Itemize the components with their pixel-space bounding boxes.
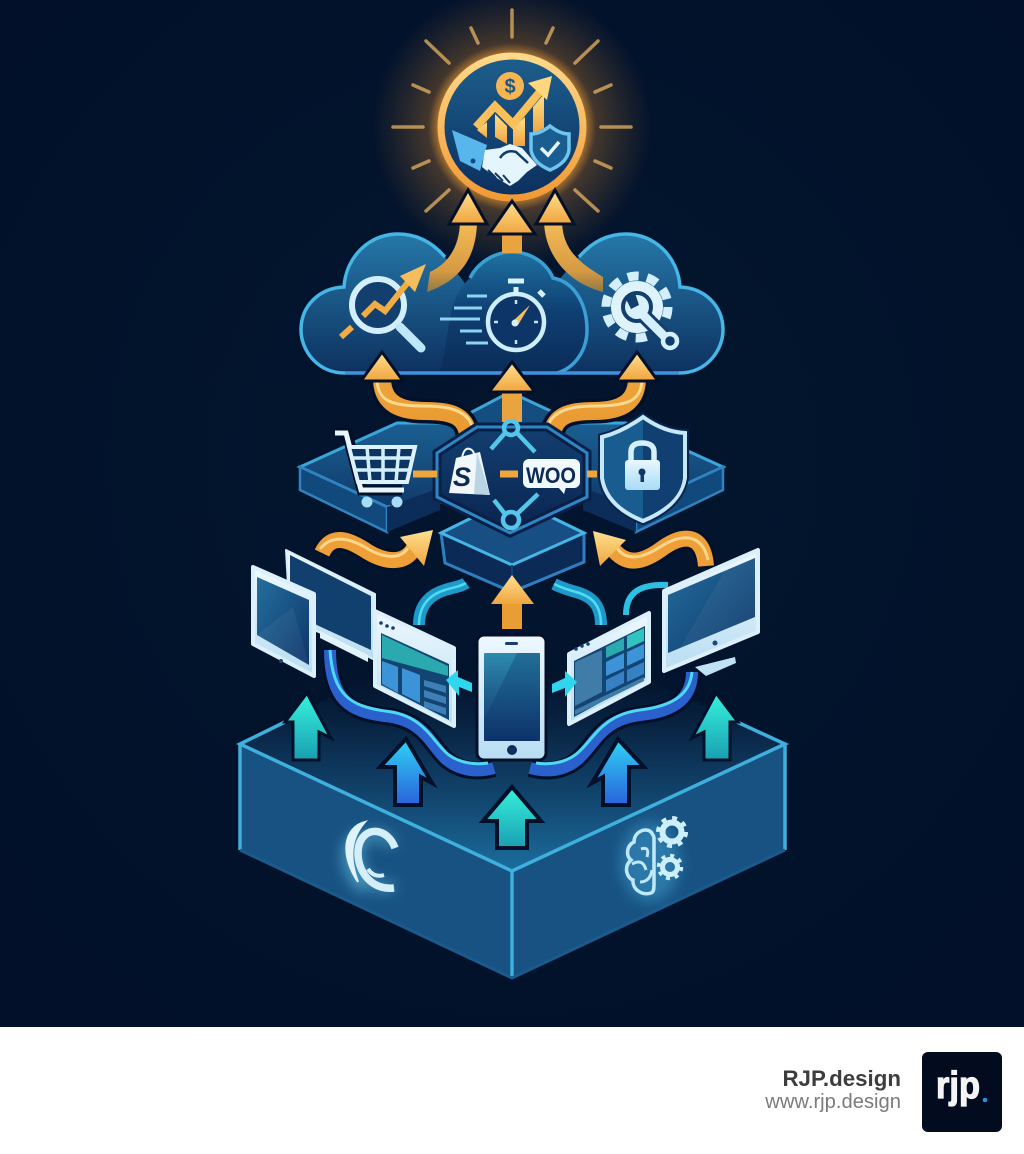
arrow: centre to sun: [489, 201, 535, 253]
lower cube: [441, 498, 584, 592]
right cloud: [520, 234, 723, 373]
small arrow: phone to left window: [446, 670, 472, 696]
monitor: [664, 550, 758, 676]
cloud base line: [345, 371, 679, 375]
brand logo: [922, 1052, 1002, 1132]
arrow: right blue: [592, 739, 644, 805]
icon: shopping cart: [335, 433, 415, 508]
small arrow: phone to right window: [552, 671, 577, 697]
arrow: centre into clouds: [489, 362, 535, 422]
brand name: RJP.design: [782, 1066, 901, 1091]
arrow: left blue: [380, 739, 432, 805]
left cloud: [301, 234, 500, 373]
growth bars: [477, 94, 544, 146]
up arrows from foundation: [285, 693, 738, 848]
icon: padlock shield: [602, 417, 685, 521]
icon: gear and wrench: [606, 276, 677, 348]
hexagon outline: [437, 427, 587, 533]
cloud layer: [301, 190, 723, 373]
shield check icon: [531, 126, 569, 170]
connector bars: [413, 470, 597, 478]
platform layer: e-commerce hub: [300, 352, 723, 592]
brand logo: rjp: [936, 1065, 980, 1107]
blue data flow lines: [330, 650, 692, 770]
laptop: [286, 550, 375, 662]
curve: left: [419, 583, 466, 625]
arrow: phone to hub: [491, 575, 534, 629]
icon: Shopify bag: S: [453, 462, 471, 492]
icon: WooCommerce bubble: [523, 459, 580, 494]
browser window left: [375, 611, 454, 726]
smartphone: [477, 635, 546, 760]
centre cloud: [440, 252, 587, 372]
centre cloud outline: [470, 252, 587, 373]
brand url: www.rjp.design: [764, 1091, 901, 1113]
coin icon: [496, 72, 524, 100]
left cloud outline: [301, 234, 445, 373]
arrow: right sweep: [593, 531, 708, 566]
flow: right: [530, 672, 692, 770]
arrow: centre teal: [483, 787, 541, 848]
growth arrow: [476, 76, 552, 127]
hub network nodes: [491, 421, 538, 528]
arrow: left into clouds: [361, 352, 473, 434]
arrow: far right teal: [692, 693, 738, 760]
icon: WooCommerce bubble: WOO: [526, 463, 576, 488]
block rim: [240, 722, 785, 978]
arrow: left sweep: [320, 530, 433, 566]
footer band: [0, 1027, 1024, 1154]
back plate: [420, 392, 600, 430]
icon: magnifier with trend: [341, 264, 426, 348]
sun glow: [372, 0, 652, 267]
right plate: [553, 423, 723, 532]
arrows: device layer to hub: [320, 530, 708, 629]
icon: curved C mark: [346, 822, 395, 890]
block lower edge: [240, 850, 785, 978]
left plate: [300, 423, 470, 532]
central hexagon hub: [437, 427, 587, 533]
curve: centre right: [554, 584, 601, 625]
icon: brain and gears: [620, 818, 686, 902]
sun rays: [393, 10, 631, 211]
device layer: [253, 550, 758, 760]
tablet: [253, 567, 314, 676]
white footer background: [0, 1027, 1024, 1154]
block left face: [239, 743, 512, 978]
sun medallion: [441, 56, 583, 198]
arrow: left to sun: [427, 190, 487, 292]
flow: left: [330, 650, 494, 770]
cyan link curves: [419, 583, 668, 625]
arrow: right into clouds: [547, 352, 658, 434]
right cloud outline: [579, 234, 723, 373]
coin icon: $: [504, 76, 516, 98]
foundation block: [239, 680, 786, 978]
curve: far right: [626, 585, 668, 615]
block right face: [512, 743, 786, 978]
sun: business growth goal: [372, 0, 652, 267]
icon: Shopify bag: [449, 449, 490, 495]
browser window right: [569, 613, 649, 724]
block top surface: [239, 680, 786, 870]
icon: stopwatch: [440, 281, 544, 350]
handshake icon: [452, 130, 537, 186]
arrow: far left teal: [285, 693, 331, 760]
arrow: right to sun: [536, 190, 603, 292]
